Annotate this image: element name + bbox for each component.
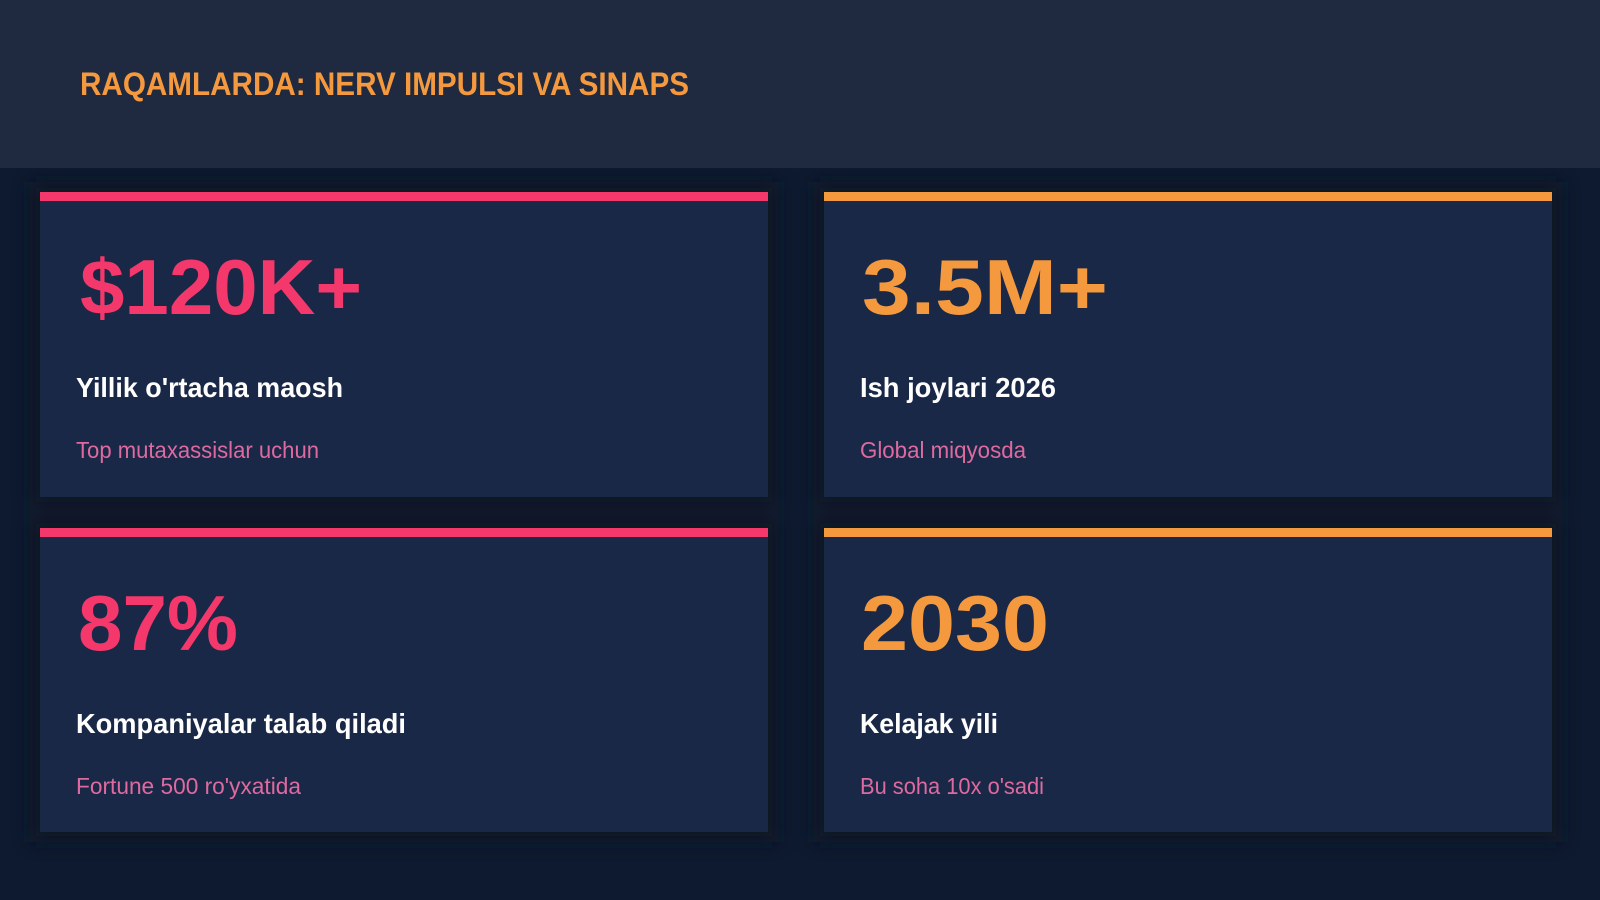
stat value: 3.5M+ [862,243,1108,331]
panel: salary [40,192,768,497]
stat note: Bu soha 10x o'sadi [860,773,1044,799]
stat value: 2030 [861,579,1049,667]
header band [0,0,1600,168]
panel: companies [40,528,768,832]
stat value: $120K+ [80,243,362,331]
stat note: Top mutaxassislar uchun [76,437,319,463]
stat label: Kelajak yili [860,708,998,739]
stat label: Yillik o'rtacha maosh [76,372,343,403]
title: RAQAMLARDA: NERV IMPULSI VA SINAPS [80,66,689,102]
stat note: Fortune 500 ro'yxatida [76,773,301,799]
panel: jobs [824,192,1552,497]
stat value: 87% [78,579,238,667]
card shadows [30,182,1562,842]
panel: future year [824,528,1552,832]
stat label: Kompaniyalar talab qiladi [76,708,406,739]
stat note: Global miqyosda [860,437,1026,463]
stat label: Ish joylari 2026 [860,372,1056,403]
